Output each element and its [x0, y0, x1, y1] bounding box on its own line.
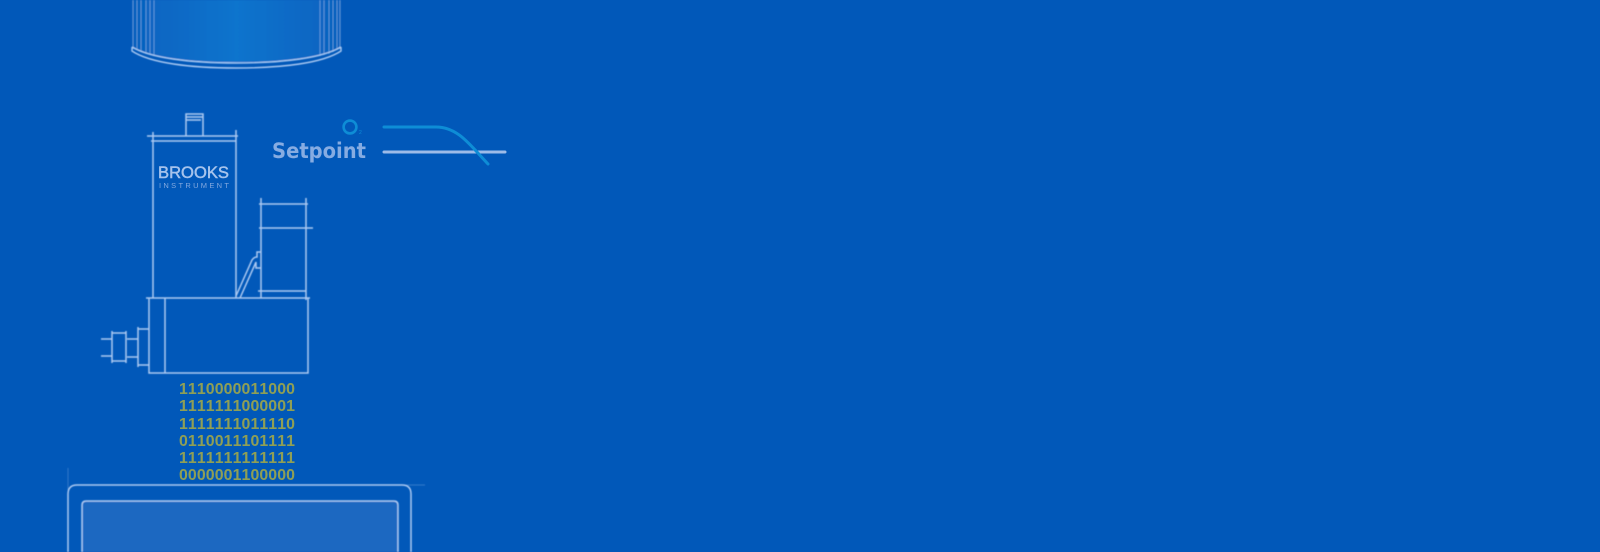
binary data: 1110000011000: [179, 381, 295, 398]
O2 curve: [384, 127, 488, 164]
binary data: 1111111000001: [179, 398, 295, 415]
binary data: 0000001100000: [179, 467, 295, 484]
binary data: 1111111111111: [179, 450, 295, 467]
setpoint label: Setpoint: [272, 139, 366, 163]
binary data: [179, 381, 295, 484]
setpoint chart: [272, 121, 505, 164]
binary data: 0110011101111: [179, 433, 295, 450]
icon: storage tank: [132, 0, 341, 68]
icon: mass flow controller: [101, 114, 313, 373]
setpoint line: [384, 150, 505, 154]
O2 label: [344, 121, 362, 136]
logo: Brooks Instrument: INSTRUMENT: [159, 181, 229, 190]
O2 label: 2: [359, 130, 362, 136]
logo: Brooks Instrument: BROOKS: [158, 163, 229, 182]
binary data: 1111111011110: [179, 416, 295, 433]
logo: Brooks Instrument: [158, 163, 229, 190]
icon: monitor: [68, 468, 425, 552]
